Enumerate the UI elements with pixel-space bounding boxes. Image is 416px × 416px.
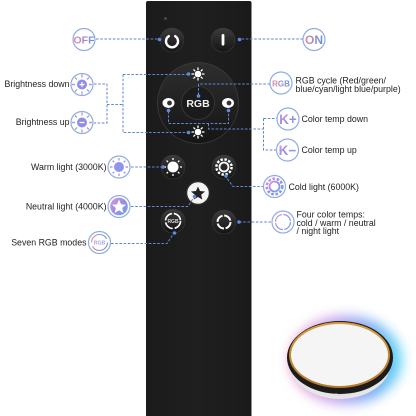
lamp base <box>290 370 390 399</box>
power off button <box>160 28 184 52</box>
icon: brightness down <box>71 74 93 96</box>
icon: K+ <box>277 108 299 130</box>
icon: K-: K− <box>279 143 296 158</box>
ON connector <box>238 38 303 41</box>
icon: RGB: RGB <box>272 80 290 88</box>
four color temps connector <box>237 220 271 224</box>
label: Warm light: Warm light (3000K) <box>31 162 107 172</box>
icon: ON: ON <box>305 33 323 47</box>
label: Color temp up: Color temp up <box>302 145 357 155</box>
label: Brightness up: Brightness up <box>16 117 70 127</box>
brightness up sun key <box>192 68 204 80</box>
color temp connectors <box>167 109 277 150</box>
icon: neutral light <box>108 196 130 218</box>
seven RGB modes button <box>161 209 185 233</box>
OFF connector <box>96 38 161 41</box>
label: Four color temps: Four color temps: <box>296 210 365 220</box>
ceiling lamp with RGB glow <box>287 316 402 404</box>
icon: cold light <box>264 176 286 198</box>
label: Brightness down: Brightness down <box>4 79 70 89</box>
cold light button <box>212 155 236 179</box>
black rim <box>287 321 393 394</box>
color temp left key <box>162 98 174 108</box>
label: Four color temps: / night light <box>296 226 340 236</box>
icon: seven RGB modes: RGB <box>94 240 106 246</box>
brightness connectors <box>94 72 190 134</box>
label: Color temp down: Color temp down <box>302 114 368 124</box>
RGB center button: RGB <box>186 98 210 110</box>
icon: four color temps <box>272 211 294 233</box>
icon: K+: K+ <box>279 112 297 127</box>
warm light button <box>161 155 185 179</box>
label: Neutral light: Neutral light (4000K) <box>26 202 107 212</box>
label: RGB cycle: RGB cycle (Red/green/ <box>296 76 387 86</box>
neutral light connector <box>131 195 196 206</box>
remote control body <box>146 1 252 416</box>
label: Cold light: Cold light (6000K) <box>288 182 359 192</box>
icon: seven RGB modes <box>88 232 110 254</box>
label: Four color temps: cold / warm / neutral <box>296 218 376 228</box>
icon: RGB <box>270 72 292 94</box>
icon: OFF <box>73 28 95 50</box>
icon: K- <box>276 139 298 161</box>
icon: brightness up <box>71 112 93 134</box>
brightness down sun key <box>192 126 204 138</box>
icon: ON <box>303 28 325 50</box>
icon: warm light <box>108 156 130 178</box>
color temp right key <box>222 98 234 108</box>
cold light connector <box>224 174 264 186</box>
four color temps button <box>212 210 236 234</box>
gold ring <box>289 322 390 388</box>
neutral light star button <box>186 182 210 204</box>
power on button <box>211 28 235 52</box>
seven RGB modes connector <box>111 231 176 244</box>
icon: OFF: OFF <box>74 34 95 46</box>
label: RGB cycle: blue/cyan/light blue/purple) <box>296 84 401 94</box>
circular dial <box>158 62 238 144</box>
RGB cycle connector <box>197 84 270 98</box>
label: Seven RGB modes: Seven RGB modes <box>11 238 87 248</box>
brand text: Bapro <box>335 393 345 397</box>
seven RGB modes button: RGB <box>167 219 179 225</box>
RGB glow halo <box>290 316 402 404</box>
white diffuser <box>291 324 388 386</box>
warm light connector <box>131 165 165 169</box>
